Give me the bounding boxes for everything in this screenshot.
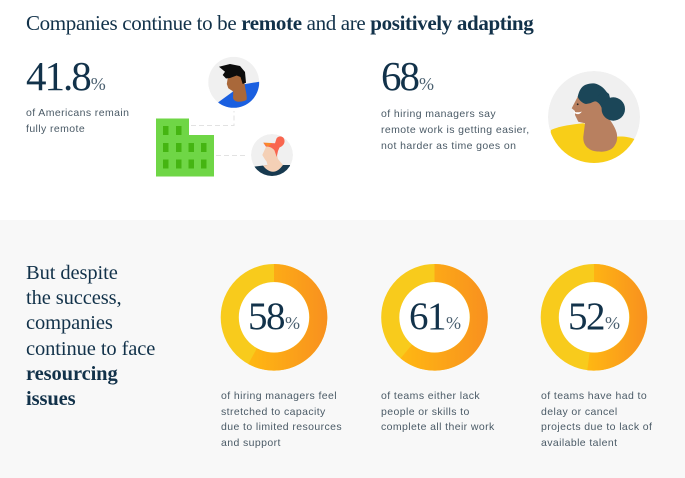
text: stretched to capacity <box>221 390 342 449</box>
heading: resourcing issues: continue to face <box>26 338 155 360</box>
text: Americans remote: of Americans remain <box>26 107 129 119</box>
donut value 52%: 52% <box>568 295 620 338</box>
icon: woman with hair bun <box>548 71 640 163</box>
donut charts <box>220 264 648 371</box>
text: stretched to capacity: stretched to capacity <box>221 406 326 418</box>
icon: office building <box>156 118 214 176</box>
text: delay or cancel projects: delay or cancel <box>541 406 618 418</box>
text: delay or cancel projects: available talent <box>541 437 617 449</box>
stat: 41.8%: 41.8% <box>26 53 106 99</box>
text: hiring managers: remote work is getting easier, <box>381 124 530 136</box>
heading: resourcing issues: resourcing <box>26 363 118 385</box>
heading: resourcing issues <box>26 262 155 410</box>
icon: woman with red hair <box>251 134 293 176</box>
stat: 68%: 68% <box>381 53 434 99</box>
text: lack people or skills: people or skills to <box>381 406 470 418</box>
text: stretched to capacity: due to limited resources <box>221 421 342 433</box>
donut: 52% <box>550 264 647 371</box>
text: lack people or skills <box>381 390 495 433</box>
text: Americans remote: fully remote <box>26 123 85 135</box>
donut value 61%: 61% <box>409 295 461 338</box>
text: delay or cancel projects <box>541 390 652 449</box>
text: delay or cancel projects: of teams have had to <box>541 390 647 402</box>
text: lack people or skills: of teams either lack <box>381 390 480 402</box>
title: Companies continue to be remote and are positively adapting <box>26 11 533 35</box>
heading: resourcing issues: issues <box>26 388 76 410</box>
text: hiring managers <box>381 108 530 152</box>
text: hiring managers: not harder as time goes on <box>381 140 516 152</box>
text: stretched to capacity: of hiring managers feel <box>221 390 337 402</box>
text: hiring managers: of hiring managers say <box>381 108 496 120</box>
donut: 61% <box>390 264 488 371</box>
donut: 58% <box>230 264 327 371</box>
text: Americans remote <box>26 107 129 135</box>
text: lack people or skills: complete all their work <box>381 421 495 433</box>
illustration: office and remote workers <box>156 57 640 176</box>
text: stretched to capacity: and support <box>221 437 281 449</box>
donut value 58%: 58% <box>248 295 300 338</box>
text: delay or cancel projects: projects due to lack of <box>541 421 652 433</box>
connector lines <box>191 111 248 156</box>
heading: resourcing issues: the success, <box>26 287 122 309</box>
icon: man with black hair <box>208 57 262 110</box>
bottom panel background <box>0 220 685 478</box>
heading: resourcing issues: companies <box>26 312 113 334</box>
heading: resourcing issues: But despite <box>26 262 118 284</box>
